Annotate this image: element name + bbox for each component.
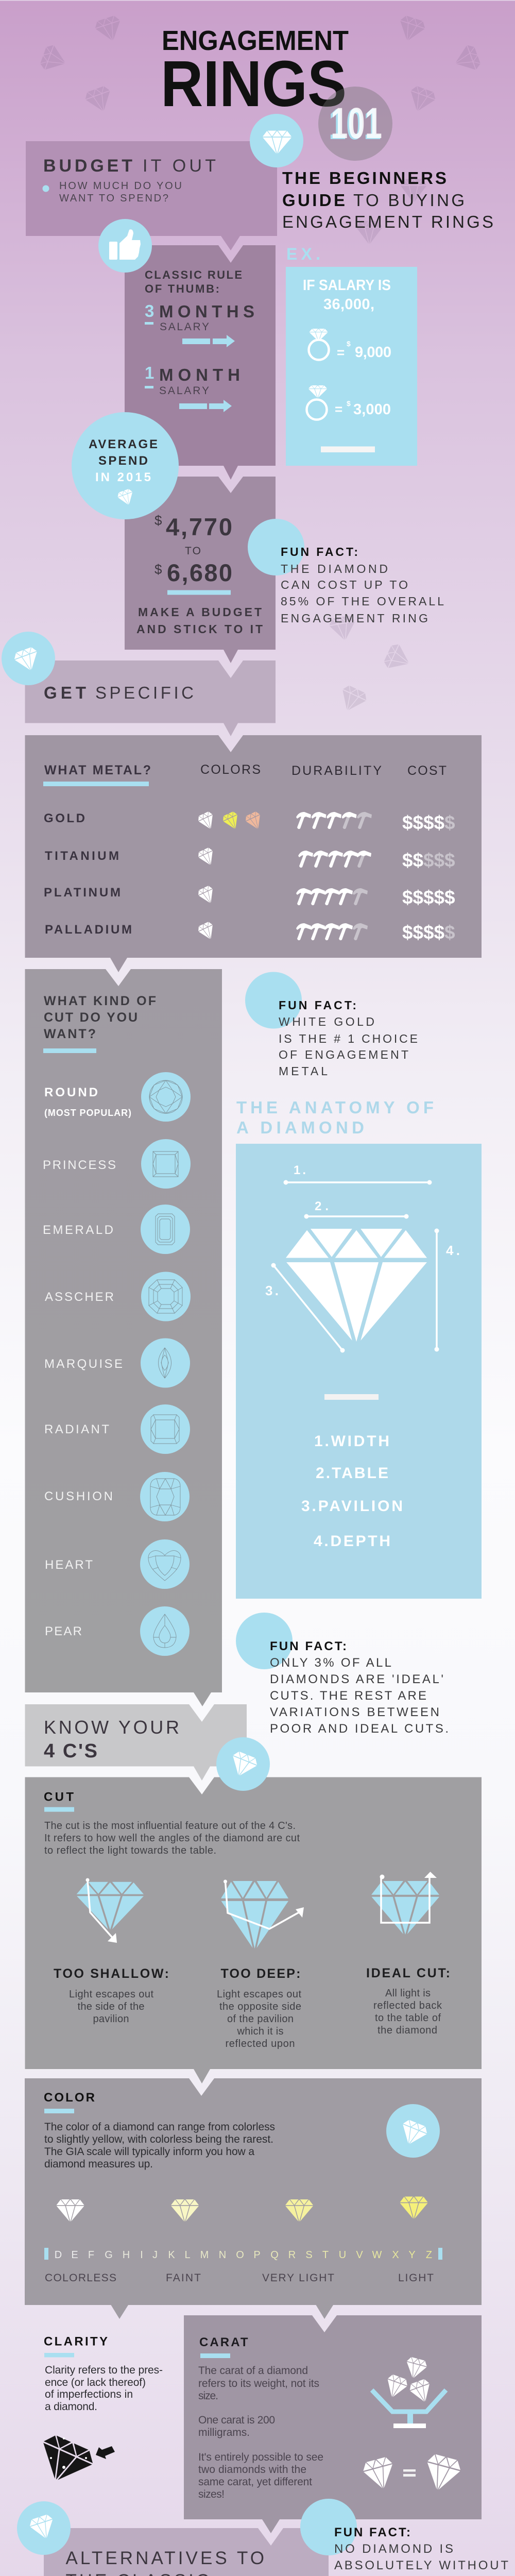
color scale D to Z: Q — [270, 2249, 279, 2261]
measure 1: width: 1. — [294, 1163, 306, 1177]
text: too deep: reflected upon — [226, 2038, 295, 2049]
list: anatomy labels: 4.DEPTH — [314, 1533, 390, 1550]
title: ENGAGEMENT — [162, 25, 349, 56]
icon: diamond badge 4 Cs — [216, 1737, 270, 1791]
cut: cushion — [44, 1472, 190, 1521]
cut: round — [44, 1072, 191, 1122]
figure: 4,770: 4,770 — [166, 513, 232, 540]
text: to: TO — [185, 545, 201, 557]
circle: average spend in 2015: AVERAGE — [89, 437, 158, 451]
subtitle: the beginners guide: TO BUYING — [353, 191, 465, 210]
heading: color — [44, 2091, 95, 2113]
text: color description: to slightly yellow, with colorless being the rarest. — [44, 2133, 273, 2145]
color scale D to Z: J — [152, 2249, 158, 2261]
diagram: ideal cut — [371, 1872, 439, 1935]
circle: average spend in 2015 — [72, 412, 179, 519]
heading: anatomy of a diamond: A DIAMOND — [236, 1118, 364, 1137]
icon: included diamond with arrow — [31, 2432, 115, 2490]
row: titanium: $$$ — [423, 850, 455, 871]
fun fact: ideal cuts — [236, 1613, 449, 1736]
badge: 101 circle: 101 — [331, 99, 382, 147]
text: cut description: It refers to how well the angles of the diamond are cut — [44, 1833, 300, 1844]
bullet question: HOW MUCH DO YOU — [59, 180, 182, 192]
color scale D to Z: Y — [408, 2249, 416, 2261]
panel: carat — [184, 2315, 482, 2533]
fraction: 3 months salary — [145, 301, 254, 333]
heading: what kind of cut: CUT DO YOU — [44, 1010, 138, 1025]
cut: radiant — [44, 1404, 190, 1454]
heading: what kind of cut: WHAT KIND OF — [44, 994, 156, 1008]
cut: heart: HEART — [45, 1558, 93, 1572]
fun fact: white gold: FUN FACT: — [279, 998, 356, 1012]
row: palladium: $ — [444, 922, 455, 943]
list: anatomy labels — [301, 1433, 403, 1550]
row: platinum: $$$$$ — [402, 887, 455, 908]
heading: budget it out — [43, 156, 216, 176]
fraction: 1 month salary — [145, 363, 240, 397]
panel: classic rule of thumb — [125, 245, 276, 480]
text: too deep: the opposite side — [219, 2001, 301, 2012]
icon: diamond badge alternatives — [17, 2501, 71, 2555]
color scale D to Z: P — [253, 2249, 261, 2261]
cut: emerald — [43, 1205, 190, 1254]
heading: color: COLOR — [44, 2091, 95, 2105]
row: gold: GOLD — [44, 811, 85, 825]
table header: COLORS — [200, 762, 261, 777]
heading: get specific: SPECIFIC — [95, 683, 194, 702]
text: color description: The GIA scale will typically inform you how a — [44, 2146, 254, 2158]
heading: carat — [199, 2335, 248, 2358]
icon: ring 3000: = — [335, 401, 342, 417]
cut: asscher — [45, 1272, 191, 1321]
cut: asscher: ASSCHER — [45, 1290, 114, 1304]
heading: anatomy of a diamond — [236, 1098, 434, 1137]
figure: 6,680: $ — [154, 562, 162, 577]
color scale D to Z: I — [140, 2249, 143, 2261]
row: palladium: PALLADIUM — [45, 923, 132, 937]
fraction: 3 months salary: MONTHS — [159, 302, 254, 321]
heading: classic rule — [145, 268, 242, 295]
fun fact: ideal cuts: POOR AND IDEAL CUTS. — [270, 1722, 449, 1736]
color scale labels: FAINT — [166, 2272, 201, 2284]
heading: clarity: CLARITY — [44, 2335, 108, 2348]
text: clarity description: a diamond. — [45, 2401, 97, 2413]
measure 4: depth: 4. — [446, 1243, 460, 1258]
cut: marquise — [44, 1338, 190, 1388]
cut: round: ROUND — [44, 1086, 98, 1099]
row: platinum — [44, 885, 455, 908]
panel: what kind of cut — [25, 969, 222, 1706]
circle: average spend in 2015: IN 2015 — [95, 470, 151, 484]
panel: color — [25, 2078, 482, 2319]
icon: equal carat diamonds — [362, 2453, 462, 2494]
fun fact: ideal cuts: VARIATIONS BETWEEN — [270, 1705, 439, 1719]
text: too shallow — [54, 1967, 169, 2025]
cut: emerald: EMERALD — [43, 1223, 113, 1237]
title: RINGS — [161, 47, 347, 120]
icon: ring 3000 — [307, 385, 391, 419]
fun fact: white gold: METAL — [279, 1064, 328, 1078]
row: palladium: $$$$ — [402, 922, 445, 943]
text: cut description: The cut is the most influential feature out of the 4 C's. — [44, 1820, 296, 1832]
color scale D to Z: K — [168, 2249, 175, 2261]
panel: budget it out — [26, 141, 277, 250]
text: color description: The color of a diamond can range from colorless — [44, 2121, 275, 2133]
arrow — [182, 335, 235, 347]
panel: cut — [25, 1777, 482, 2083]
text: clarity description: ence (or lack thereof) — [45, 2377, 146, 2388]
fraction: 3 months salary: 3 — [145, 301, 154, 320]
fun fact: white gold — [245, 972, 418, 1078]
fun fact: diamond cost: FUN FACT: — [281, 545, 358, 558]
icon: ring 3000: 3,000 — [353, 401, 391, 418]
row: gold: $$$$ — [402, 812, 445, 833]
color scale D to Z: M — [200, 2249, 209, 2261]
heading: alternatives: ALTERNATIVES TO — [66, 2548, 264, 2568]
text: ideal cut: to the table of — [375, 2012, 441, 2024]
icon: ring 9000: 9,000 — [355, 344, 391, 361]
panel: average spend range — [125, 477, 276, 663]
figure: 6,680: 6,680 — [167, 559, 232, 586]
table header — [43, 762, 447, 786]
fraction: 1 month salary: 1 — [145, 363, 154, 382]
cut: marquise: MARQUISE — [44, 1357, 123, 1371]
heading: what kind of cut — [43, 994, 156, 1053]
color scale D to Z: W — [372, 2249, 382, 2261]
color scale D to Z: H — [123, 2249, 130, 2261]
color scale D to Z: E — [71, 2249, 78, 2261]
color scale D to Z: O — [236, 2249, 244, 2261]
icon: ring 9000: $ — [347, 340, 351, 348]
text: too shallow: Light escapes out — [69, 1989, 153, 2000]
text: make a budget — [136, 605, 263, 636]
color scale D to Z: N — [219, 2249, 226, 2261]
text: ideal cut — [366, 1966, 450, 2036]
table header: WHAT METAL? — [44, 763, 151, 777]
text: ideal cut: the diamond — [377, 2025, 437, 2036]
heading: carat: CARAT — [199, 2335, 248, 2349]
row: platinum: PLATINUM — [44, 886, 121, 900]
text: carat description: sizes! — [198, 2488, 225, 2500]
diagram: too shallow — [77, 1878, 144, 1943]
fun fact: diamond cost — [248, 519, 444, 625]
color scale D to Z — [44, 2248, 442, 2261]
cut: cushion: CUSHION — [44, 1489, 113, 1503]
text: ideal cut: All light is — [385, 1988, 431, 1999]
diagram: too deep — [221, 1879, 304, 1948]
text: carat description: refers to its weight, not its — [198, 2378, 319, 2389]
text: carat description — [198, 2365, 323, 2500]
color scale D to Z: S — [305, 2249, 313, 2261]
cut: radiant: RADIANT — [44, 1422, 109, 1436]
color scale labels: VERY LIGHT — [262, 2272, 334, 2284]
row: titanium — [45, 846, 455, 871]
text: clarity description: of imperfections in — [45, 2388, 133, 2400]
measure 2: table — [304, 1199, 409, 1219]
panel: what metal table — [25, 735, 482, 972]
fun fact: white gold: IS THE # 1 CHOICE — [279, 1032, 418, 1045]
subtitle: the beginners guide: GUIDE — [282, 191, 345, 210]
color scale D to Z: V — [356, 2249, 363, 2261]
icon: ring 9000: = — [337, 345, 345, 360]
color scale D to Z: T — [322, 2249, 329, 2261]
panel: get specific — [25, 660, 276, 736]
text: too deep: which it is — [237, 2026, 283, 2037]
fraction: 1 month salary: MONTH — [159, 365, 240, 384]
color scale D to Z: D — [55, 2249, 62, 2261]
fraction: 1 month salary: SALARY — [159, 385, 209, 397]
color scale D to Z: F — [88, 2249, 94, 2261]
text: too shallow: pavilion — [93, 2013, 129, 2025]
table header: DURABILITY — [291, 764, 382, 778]
color scale labels: COLORLESS — [45, 2272, 116, 2284]
list: anatomy labels: 2.TABLE — [316, 1465, 388, 1482]
fun fact: diamond cost: ENGAGEMENT RING — [281, 612, 428, 625]
measure 1: width — [283, 1163, 432, 1185]
subtitle: the beginners guide: ENGAGEMENT RINGS — [282, 212, 493, 231]
heading: get specific: GET — [44, 683, 86, 702]
cut: pear: PEAR — [45, 1624, 82, 1638]
text: make a budget: AND STICK TO IT — [136, 622, 263, 636]
row: titanium: TITANIUM — [45, 849, 119, 863]
fun fact: imperfections: ABSOLUTELY WITHOUT — [334, 2558, 508, 2572]
measure 3: pavilion — [265, 1263, 345, 1353]
figure: 4,770: $ — [154, 513, 162, 528]
heading: cut — [44, 1790, 74, 1812]
icon: diamond badge get specific — [2, 632, 55, 685]
text: cut description — [44, 1820, 300, 1856]
text: carat description: The carat of a diamond — [198, 2365, 308, 2377]
text: if salary is — [303, 277, 391, 313]
badge: 101 circle — [318, 87, 392, 161]
table header: COST — [407, 764, 447, 778]
text: too shallow: TOO SHALLOW: — [54, 1967, 169, 1981]
fun fact: imperfections: FUN FACT: — [334, 2526, 410, 2539]
text: carat description: It's entirely possible to see — [198, 2451, 323, 2463]
color scale D to Z: G — [105, 2249, 113, 2261]
text: ideal cut: IDEAL CUT: — [366, 1966, 450, 1980]
cut: heart — [45, 1539, 190, 1589]
section: clarity — [31, 2335, 163, 2490]
text: clarity description — [45, 2364, 163, 2413]
fun fact: imperfections: NO DIAMOND IS — [334, 2542, 453, 2556]
heading: classic rule: CLASSIC RULE — [145, 268, 242, 281]
cut: round: (MOST POPULAR) — [44, 1108, 131, 1118]
background diamond pattern — [39, 14, 482, 716]
row: palladium — [45, 921, 455, 943]
panel: anatomy diagram — [236, 1144, 482, 1599]
text: carat description: size. — [198, 2390, 218, 2402]
fun fact: diamond cost: THE DIAMOND — [281, 562, 388, 575]
subtitle: the beginners guide — [282, 168, 493, 231]
diagram diamond — [286, 1229, 427, 1342]
badge: 101 circle: 101 — [329, 100, 381, 148]
row: gold: $ — [444, 812, 455, 833]
fun fact: diamond cost: CAN COST UP TO — [281, 578, 408, 591]
text: make a budget: MAKE A BUDGET — [138, 605, 262, 619]
bullet question: WANT TO SPEND? — [59, 193, 168, 204]
fun fact: ideal cuts: ONLY 3% OF ALL — [270, 1656, 391, 1670]
color scale D to Z: U — [339, 2249, 346, 2261]
heading: know your 4 Cs: 4 C'S — [44, 1740, 97, 1762]
text: carat description: two diamonds with the — [198, 2464, 306, 2476]
measure 3: pavilion: 3. — [265, 1283, 279, 1298]
bullet question — [42, 180, 182, 204]
heading: what kind of cut: WANT? — [44, 1027, 96, 1041]
text: clarity description: Clarity refers to the pres- — [45, 2364, 163, 2376]
row: titanium: $$ — [402, 850, 423, 871]
row: gold — [44, 810, 455, 833]
heading: budget it out: BUDGET — [43, 156, 132, 176]
fraction: 3 months salary: SALARY — [160, 321, 209, 333]
heading: know your 4 Cs — [44, 1717, 179, 1762]
text: too shallow: the side of the — [77, 2001, 144, 2012]
heading: classic rule: OF THUMB: — [145, 282, 219, 295]
heading: cut: CUT — [44, 1790, 74, 1804]
color scale labels — [45, 2272, 434, 2284]
panel: salary example — [286, 267, 417, 466]
icon: ring 3000: $ — [347, 399, 351, 408]
text: carat description: same carat, yet different — [198, 2476, 312, 2488]
heading: anatomy of a diamond: THE ANATOMY OF — [236, 1098, 434, 1117]
color scale D to Z: Z — [426, 2249, 432, 2261]
icon: diamond badge color — [386, 2104, 440, 2158]
color scale labels: LIGHT — [398, 2272, 434, 2284]
icon: ring 9000 — [309, 329, 391, 361]
text: carat description: milligrams. — [198, 2427, 250, 2438]
diamonds: color samples — [57, 2197, 427, 2222]
text: if salary is: 36,000, — [323, 296, 374, 313]
color scale D to Z: L — [184, 2249, 191, 2261]
text: too deep — [217, 1967, 301, 2049]
measure 2: table: 2. — [315, 1199, 329, 1213]
heading: get specific — [44, 683, 194, 702]
fun fact: ideal cuts: FUN FACT: — [270, 1639, 347, 1653]
fun fact: ideal cuts: CUTS. THE REST ARE — [270, 1689, 426, 1703]
color scale D to Z: R — [288, 2249, 296, 2261]
text: if salary is: IF SALARY IS — [303, 277, 391, 294]
panel: alternatives — [44, 2528, 329, 2576]
text: too deep: of the pavilion — [227, 2013, 294, 2025]
arrow — [179, 400, 232, 412]
text: color description: diamond measures up. — [44, 2158, 153, 2170]
subtitle: the beginners guide: THE BEGINNERS — [282, 168, 447, 188]
fun fact: imperfections — [300, 2499, 508, 2576]
panel: know your 4 Cs — [25, 1704, 247, 1781]
heading: budget it out: IT OUT — [143, 156, 216, 176]
fun fact: white gold: OF ENGAGEMENT — [279, 1048, 408, 1061]
icon: carat scale — [372, 2356, 446, 2428]
list: anatomy labels: 1.WIDTH — [314, 1433, 389, 1450]
text: too deep: Light escapes out — [217, 1989, 301, 2000]
text: carat description: One carat is 200 — [198, 2414, 275, 2426]
text: color description — [44, 2121, 275, 2170]
list: anatomy labels: 3.PAVILION — [301, 1498, 403, 1515]
label: EX.: EX. — [286, 245, 320, 263]
heading: know your 4 Cs: KNOW YOUR — [44, 1717, 179, 1738]
icon: diamond badge top — [250, 114, 303, 167]
fun fact: diamond cost: 85% OF THE OVERALL — [281, 595, 444, 608]
heading: clarity — [44, 2335, 108, 2358]
cut: princess: PRINCESS — [43, 1158, 116, 1172]
fun fact: white gold: WHITE GOLD — [279, 1015, 374, 1028]
fun fact: ideal cuts: DIAMONDS ARE 'IDEAL' — [270, 1672, 443, 1686]
heading: alternatives — [66, 2548, 281, 2576]
color scale D to Z: X — [392, 2249, 399, 2261]
text: ideal cut: reflected back — [373, 2000, 442, 2011]
icon: thumbs up — [98, 219, 152, 273]
cut: pear — [45, 1606, 190, 1656]
text: too deep: TOO DEEP: — [220, 1967, 301, 1981]
cut: princess — [43, 1139, 191, 1189]
measure 4: depth — [435, 1228, 460, 1352]
circle: average spend in 2015: SPEND — [98, 454, 148, 468]
text: cut description: to reflect the light towards the table. — [44, 1845, 216, 1856]
